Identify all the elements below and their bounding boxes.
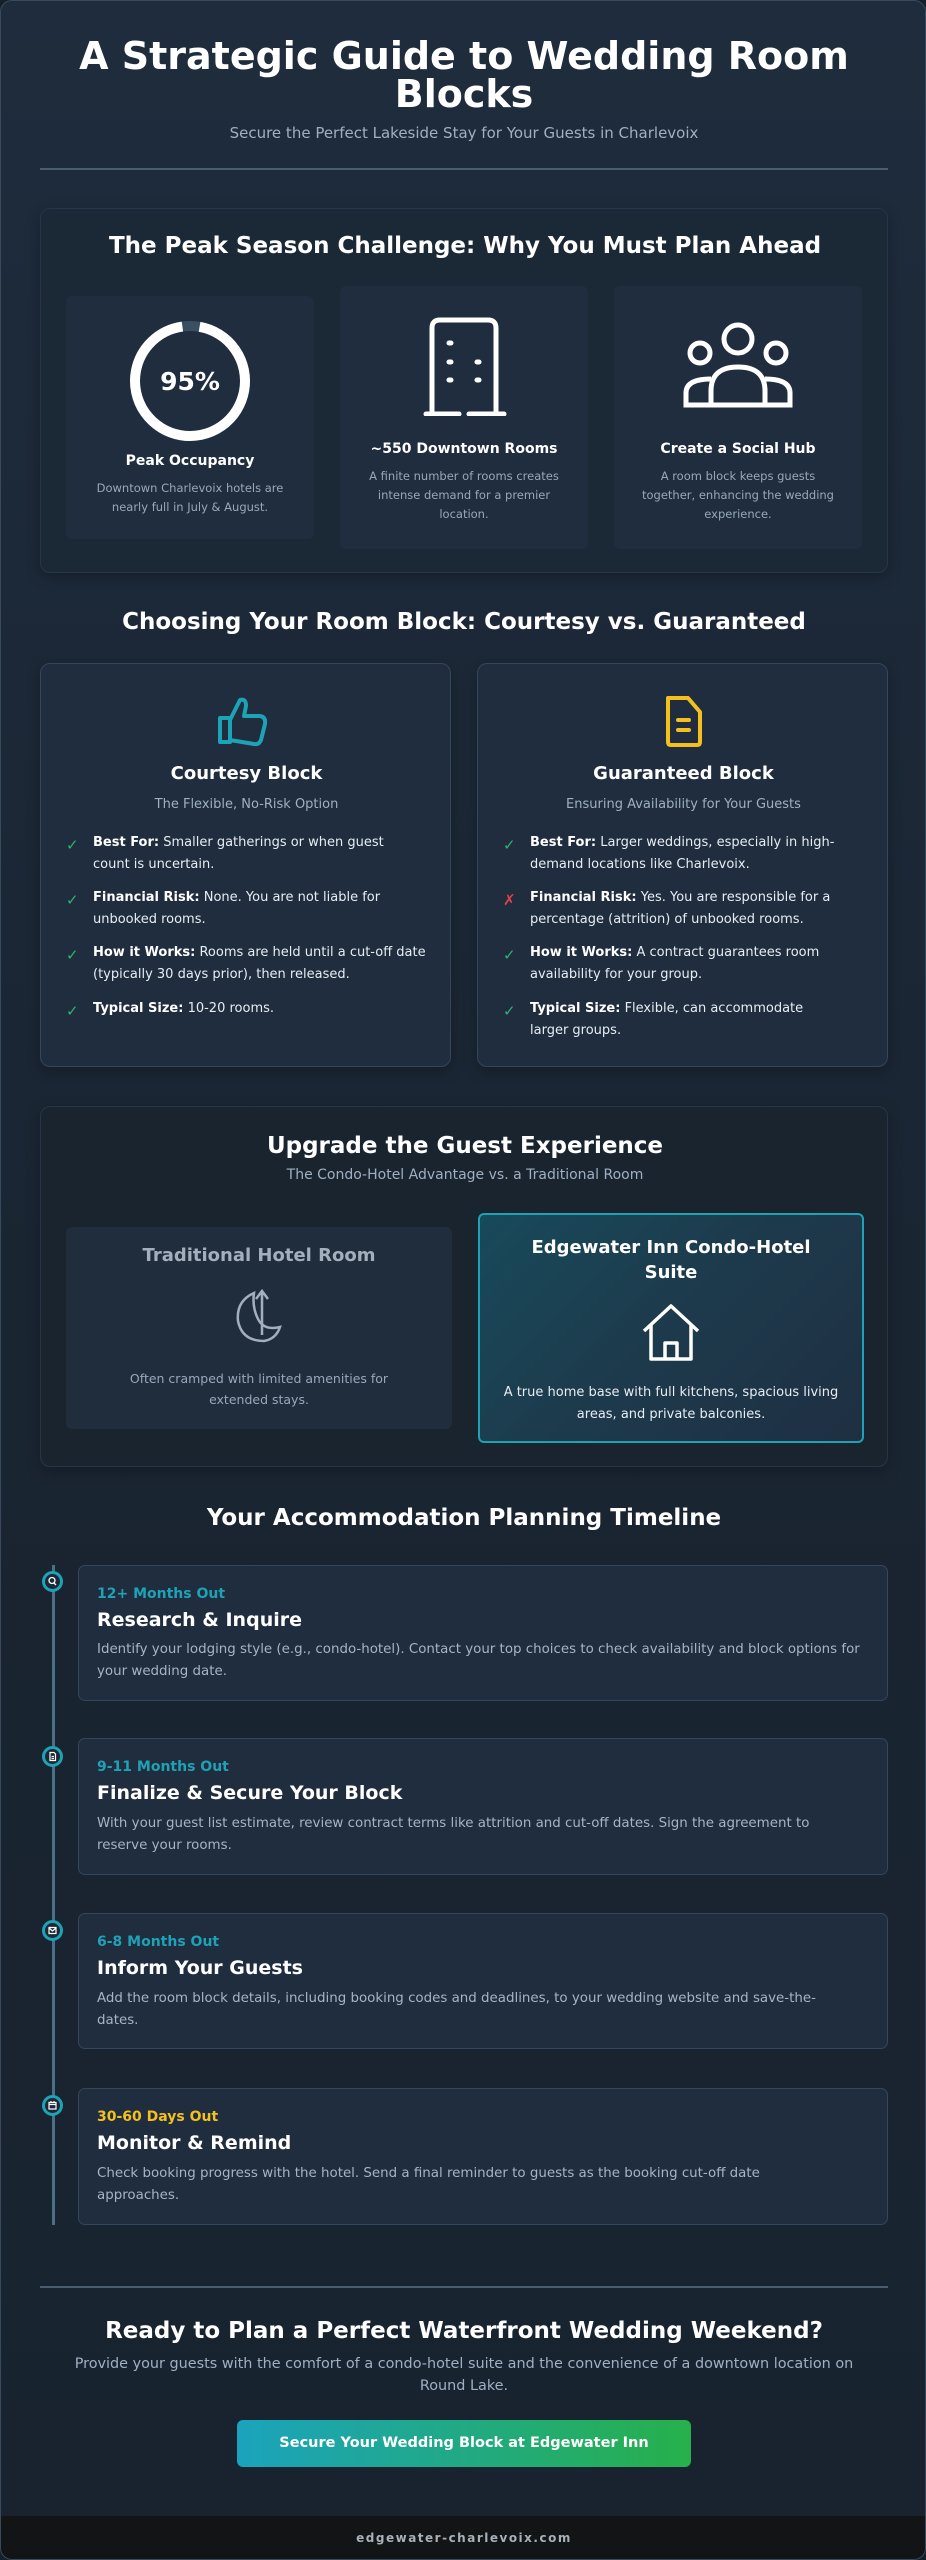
panel: guaranteed block	[477, 663, 888, 1067]
title: courtesy: Courtesy Block	[171, 763, 322, 784]
title: edgewater: Edgewater Inn Condo-Hotel	[531, 1237, 811, 1258]
timeline step 3: 6-8 Months Out	[97, 1934, 219, 1950]
text: social hub: A room block keeps guests together, enhancing the wedding experience.	[642, 469, 834, 521]
list: courtesy items	[66, 835, 426, 1020]
icon: moon	[236, 1289, 282, 1342]
timeline step 1: Research & Inquire	[97, 1609, 302, 1631]
subtitle: guaranteed: Ensuring Availability for Your Guests	[566, 797, 801, 812]
timeline step 4	[78, 2088, 888, 2225]
text: downtown rooms	[369, 441, 559, 521]
timeline line	[52, 1565, 55, 2225]
title: A Strategic Guide to Wedding Room Blocks	[79, 34, 849, 116]
list: guaranteed items: ✗	[503, 891, 516, 909]
timeline step 3: Add the room block details, including booking codes and deadlines, to your wedding website and save-the-dates.	[97, 1991, 816, 2028]
text: social hub	[642, 441, 834, 521]
timeline step 2: Finalize & Secure Your Block	[97, 1782, 402, 1804]
card: social hub	[614, 286, 862, 549]
text: downtown rooms: A finite number of rooms creates intense demand for a premier location.	[369, 469, 559, 521]
timeline step 2: With your guest list estimate, review contract terms like attrition and cut-off dates. Sign the agreement to reserve your rooms.	[97, 1816, 809, 1853]
text: peak occupancy	[97, 453, 283, 514]
heading: CTA: Ready to Plan a Perfect Waterfront Wedding Weekend?	[105, 2318, 823, 2344]
list: courtesy items: ✓	[66, 836, 79, 854]
node: document	[42, 1746, 63, 1767]
panel: courtesy block	[40, 663, 451, 1067]
subtitle: courtesy: The Flexible, No-Risk Option	[155, 797, 338, 812]
title: traditional: Traditional Hotel Room	[143, 1245, 375, 1266]
icon: thumbs up	[218, 698, 268, 746]
list: guaranteed items: Typical Size: Flexible, can accommodate larger groups.	[530, 1001, 803, 1038]
node: search	[42, 1571, 63, 1592]
icon: document	[666, 696, 702, 747]
heading: upgrade: Upgrade the Guest Experience	[267, 1133, 663, 1159]
node: mail	[42, 1920, 63, 1941]
button: CTA	[237, 2420, 691, 2467]
list: guaranteed items: ✓	[503, 946, 516, 964]
text: peak occupancy: Peak Occupancy	[126, 453, 254, 469]
footer	[1, 2516, 926, 2560]
text: edgewater: A true home base with full kitchens, spacious living areas, and private balconies.	[504, 1385, 838, 1422]
icon: 95% ring	[130, 321, 250, 441]
list: guaranteed items: How it Works: A contract guarantees room availability for your group.	[530, 945, 819, 982]
list: courtesy items: Typical Size: 10-20 rooms.	[93, 1001, 274, 1016]
heading: peak season: The Peak Season Challenge: Why You Must Plan Ahead	[109, 233, 821, 259]
timeline step 2	[78, 1738, 888, 1875]
title: edgewater: Suite	[645, 1262, 697, 1283]
text: CTA description	[75, 2356, 853, 2394]
icon: building	[424, 318, 506, 416]
timeline step 1: 12+ Months Out	[97, 1586, 225, 1602]
subtitle: upgrade: The Condo-Hotel Advantage vs. a Traditional Room	[287, 1167, 643, 1183]
timeline step 1: Identify your lodging style (e.g., condo-hotel). Contact your top choices to check availability and block options for your wedding date.	[97, 1642, 860, 1679]
list: courtesy items: Financial Risk: None. You are not liable for unbooked rooms.	[93, 890, 380, 927]
subtitle: Secure the Perfect Lakeside Stay for Your Guests in Charlevoix	[230, 124, 698, 142]
timeline step 1	[78, 1565, 888, 1701]
text: CTA description: Provide your guests with the comfort of a condo-hotel suite and the convenience of a downtown location on	[75, 2356, 853, 2372]
timeline step 3: Inform Your Guests	[97, 1957, 303, 1979]
node: calendar	[42, 2095, 63, 2116]
card: downtown rooms	[340, 286, 588, 549]
button: CTA: Secure Your Wedding Block at Edgewater Inn	[279, 2435, 649, 2451]
heading: timeline: Your Accommodation Planning Timeline	[207, 1505, 721, 1531]
icon: house	[642, 1304, 700, 1361]
list: guaranteed items: ✓	[503, 1002, 516, 1020]
card: edgewater suite	[478, 1213, 864, 1443]
icon: group	[684, 322, 792, 408]
timeline step 2: 9-11 Months Out	[97, 1759, 229, 1775]
list: guaranteed items	[503, 835, 834, 1038]
title: guaranteed: Guaranteed Block	[593, 763, 774, 784]
timeline step 4: 30-60 Days Out	[97, 2109, 218, 2125]
icon: 95% ring: 95%	[160, 367, 220, 396]
footer: edgewater-charlevoix.com	[356, 2531, 572, 2545]
text: social hub: Create a Social Hub	[660, 441, 816, 457]
card: traditional hotel room	[66, 1227, 452, 1429]
list: guaranteed items: ✓	[503, 836, 516, 854]
list: courtesy items: Best For: Smaller gatherings or when guest count is uncertain.	[93, 835, 384, 872]
timeline step 4: Check booking progress with the hotel. Send a final reminder to guests as the booking cut-off date approaches.	[97, 2166, 760, 2203]
list: courtesy items: ✓	[66, 946, 79, 964]
panel: peak season challenge	[40, 208, 888, 573]
panel: upgrade guest experience	[40, 1106, 888, 1467]
list: guaranteed items: Best For: Larger weddings, especially in high-demand locations like Charlevoix.	[530, 835, 834, 872]
text: downtown rooms: ~550 Downtown Rooms	[370, 441, 558, 457]
list: courtesy items: ✓	[66, 891, 79, 909]
timeline step 3	[78, 1913, 888, 2049]
text: CTA description: Round Lake.	[420, 2378, 508, 2394]
text: peak occupancy: Downtown Charlevoix hotels are nearly full in July & August.	[97, 481, 283, 514]
title: edgewater	[531, 1237, 811, 1283]
heading: choosing room block: Choosing Your Room Block: Courtesy vs. Guaranteed	[122, 609, 806, 635]
list: courtesy items: ✓	[66, 1002, 79, 1020]
timeline step 4: Monitor & Remind	[97, 2132, 291, 2154]
list: guaranteed items: Financial Risk: Yes. You are responsible for a percentage (attrition) of unbooked rooms.	[530, 890, 830, 927]
text: traditional: Often cramped with limited amenities for extended stays.	[130, 1371, 388, 1407]
card: peak occupancy	[66, 296, 314, 539]
list: courtesy items: How it Works: Rooms are held until a cut-off date (typically 30 days prior), then released.	[93, 945, 426, 982]
